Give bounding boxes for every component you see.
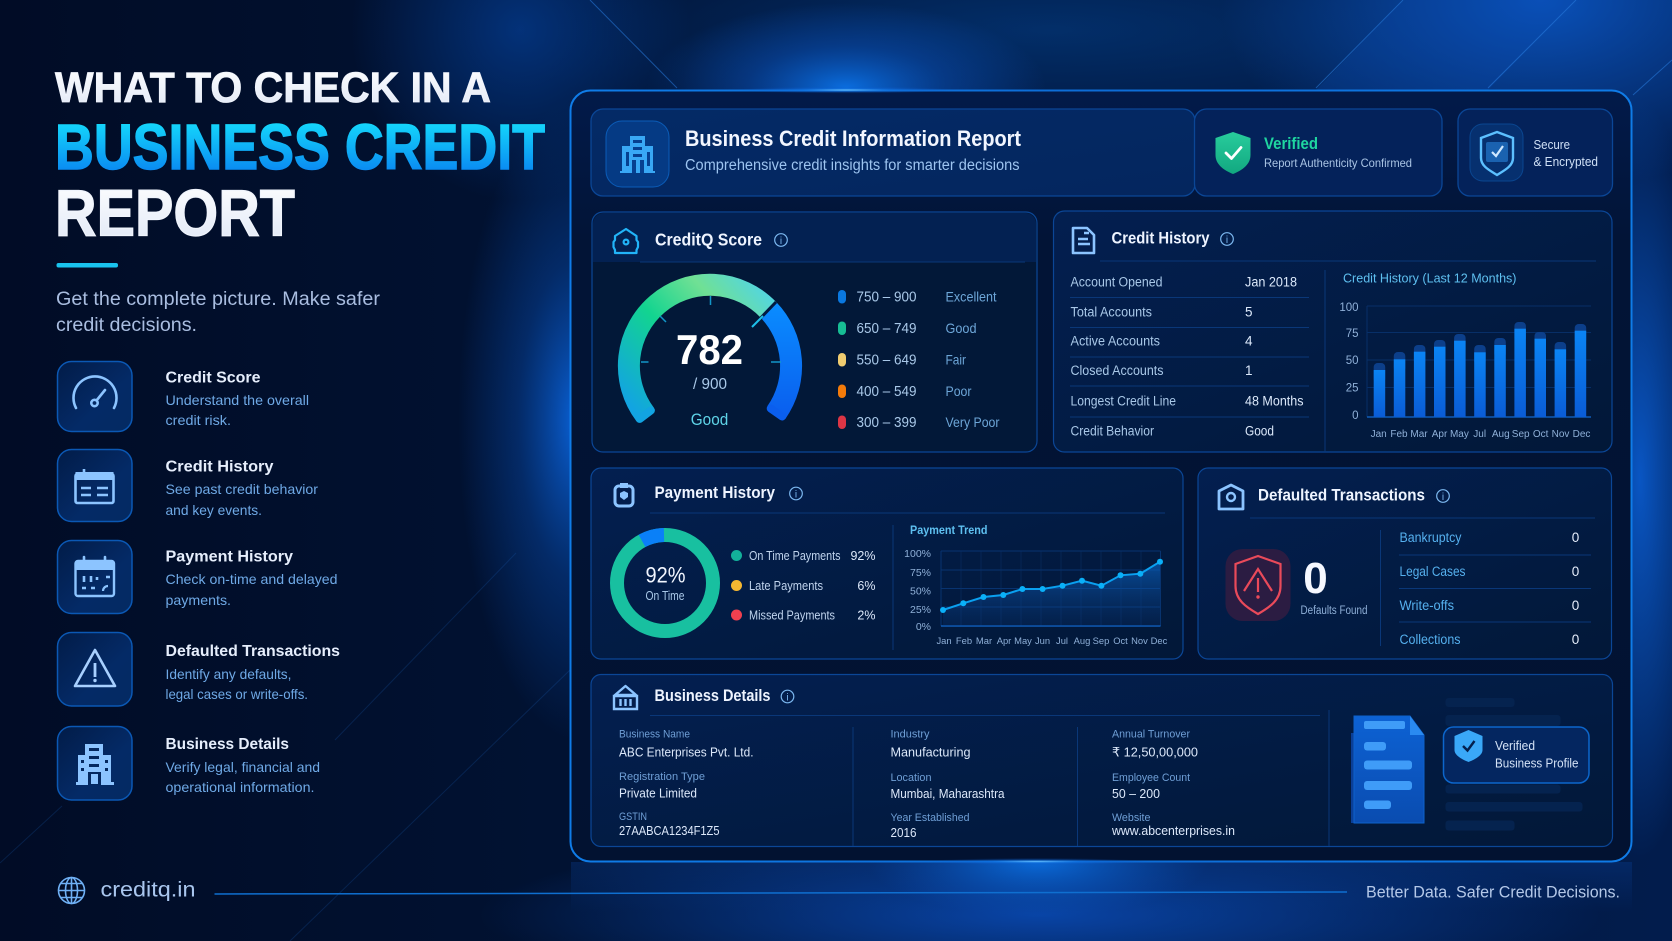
bar chart: 50 [1346, 355, 1358, 367]
icon: bank [614, 686, 637, 709]
payment legend: Missed Payments [749, 608, 835, 622]
line chart: 100% [904, 548, 931, 560]
document illustration [1351, 716, 1424, 823]
defaults list [1399, 530, 1591, 647]
line chart: Jun [1035, 635, 1050, 646]
details column 1 [619, 728, 754, 838]
defaulted transactions text: Identify any defaults, [166, 666, 292, 682]
credit score text: credit risk. [166, 412, 231, 428]
score legend: Excellent [946, 288, 997, 304]
footer [58, 878, 1620, 904]
details column 2 [890, 728, 1005, 840]
details column 2: 2016 [890, 825, 916, 840]
credit history text: Credit History [166, 458, 274, 476]
line chart: Dec [1151, 635, 1168, 646]
icon: bank shield [1219, 485, 1243, 509]
score max: / 900 [693, 376, 727, 393]
business details text: Verify legal, financial and [166, 759, 320, 775]
line chart: 50% [910, 586, 931, 598]
info icon [1437, 490, 1449, 503]
history table: 1 [1245, 363, 1253, 378]
tagline: Better Data. Safer Credit Decisions. [1366, 884, 1620, 902]
line chart [904, 548, 1168, 646]
history table: Account Opened [1070, 274, 1162, 290]
score legend: Very Poor [946, 414, 1000, 430]
subtitle [56, 289, 381, 336]
line chart: 25% [910, 604, 931, 616]
score legend [838, 288, 1000, 431]
score legend: 400 – 549 [856, 384, 916, 400]
heading: CreditQ Score [655, 230, 762, 250]
defaulted transactions text [166, 643, 340, 702]
payment history text [166, 548, 338, 608]
panel: credit history [1054, 211, 1612, 452]
details column 1: Business Name [619, 728, 690, 740]
bar chart: Nov [1552, 429, 1569, 440]
verified profile badge [1444, 727, 1589, 783]
bar chart: May [1450, 429, 1469, 440]
details column 2: Mumbai, Maharashtra [890, 786, 1005, 801]
donut value: 92% [646, 562, 686, 588]
info icon [775, 234, 787, 247]
bar chart: Jan [1371, 429, 1387, 440]
history table: Total Accounts [1070, 304, 1152, 320]
defaults list: Legal Cases [1400, 564, 1466, 579]
info icon [781, 690, 794, 704]
business details text: Business Details [166, 736, 289, 753]
title [55, 64, 545, 250]
bar chart [1339, 302, 1591, 440]
trend title: Payment Trend [910, 523, 988, 537]
history table: 5 [1245, 304, 1253, 320]
details column 2: Industry [890, 728, 930, 740]
score legend: Fair [946, 352, 966, 368]
line chart: May [1014, 635, 1032, 646]
verified text: Verified [1264, 134, 1318, 153]
icon: building [76, 744, 114, 785]
item: payment history [58, 540, 338, 614]
defaults list: 0 [1572, 598, 1579, 613]
details column 2: Year Established [890, 812, 970, 824]
chart title: Credit History (Last 12 Months) [1343, 270, 1516, 286]
payment legend: On Time Payments [749, 549, 840, 563]
verified profile badge: Verified [1495, 739, 1535, 753]
business details text [166, 736, 320, 795]
defaults list: 0 [1572, 530, 1579, 545]
title: BUSINESS CREDIT [55, 111, 545, 183]
bar chart: 0 [1352, 410, 1358, 422]
line chart: Feb [956, 635, 972, 646]
credit score text: Credit Score [166, 370, 261, 386]
history table: Closed Accounts [1070, 363, 1164, 378]
defaults label: Defaults Found [1300, 605, 1368, 617]
history table: Credit Behavior [1070, 424, 1154, 438]
icon: document [1073, 228, 1094, 253]
panel: payment history [591, 468, 1183, 659]
payment history text: Payment History [166, 548, 293, 566]
verified text [1264, 134, 1412, 170]
score legend: 650 – 749 [856, 321, 916, 337]
line chart: Mar [976, 635, 992, 646]
secure text: Secure [1534, 138, 1570, 152]
details column 3: 50 – 200 [1112, 786, 1160, 801]
icon: secure shield [1470, 124, 1523, 181]
history table: 4 [1245, 334, 1253, 348]
item: credit history [58, 450, 318, 522]
subtitle: Get the complete picture. Make safer [56, 289, 381, 310]
website: creditq.in [100, 878, 196, 902]
donut chart [617, 535, 713, 631]
info icon [790, 487, 802, 500]
item: credit score [58, 362, 309, 432]
details column 3: www.abcenterprises.in [1111, 823, 1235, 838]
details column 1: Registration Type [619, 771, 705, 783]
details column 1: ABC Enterprises Pvt. Ltd. [619, 744, 754, 760]
details column 3: Annual Turnover [1112, 728, 1190, 740]
bar chart: 25 [1346, 382, 1358, 394]
score legend: 300 – 399 [856, 415, 916, 431]
secure card [1458, 109, 1612, 196]
bar chart: Dec [1573, 429, 1590, 440]
info icon: i [1442, 492, 1444, 503]
info icon: i [786, 692, 789, 704]
donut label: On Time [646, 589, 685, 603]
icon: warning triangle [75, 650, 115, 686]
payment legend: Late Payments [749, 579, 823, 593]
bar chart: Aug [1492, 429, 1510, 440]
details column 3: Website [1112, 812, 1150, 824]
title: REPORT [55, 176, 295, 250]
line chart: Jul [1056, 635, 1068, 646]
details column 1: GSTIN [619, 811, 647, 823]
heading: Credit History [1112, 230, 1210, 248]
verified card [1194, 109, 1442, 196]
gauge chart [629, 285, 791, 429]
verified text: Report Authenticity Confirmed [1264, 156, 1412, 170]
credit history text [166, 458, 318, 518]
panel: business details [591, 674, 1612, 846]
defaulted transactions text: legal cases or write-offs. [166, 686, 308, 702]
info icon: i [780, 236, 782, 247]
line chart: Oct [1113, 635, 1128, 646]
heading: Payment History [654, 484, 776, 502]
score value: 782 [676, 326, 743, 373]
details column 1: Private Limited [619, 786, 697, 800]
info icon [1221, 233, 1233, 246]
details column 3: Employee Count [1112, 772, 1190, 784]
payment history text: Check on-time and delayed [166, 571, 338, 587]
line chart: 0% [916, 621, 931, 633]
score rating: Good [691, 410, 728, 429]
info icon: i [795, 490, 797, 500]
payment legend: 92% [850, 549, 876, 563]
report header [591, 109, 1195, 196]
credit score text: Understand the overall [166, 392, 309, 408]
defaults count: 0 [1303, 554, 1328, 603]
bar chart: Apr [1432, 429, 1448, 440]
bar chart: Jul [1473, 429, 1486, 440]
secure text [1534, 138, 1598, 169]
heading: Defaulted Transactions [1258, 486, 1425, 504]
item: defaulted transactions [58, 632, 340, 706]
bar chart: 100 [1339, 302, 1358, 314]
defaulted transactions text: Defaulted Transactions [166, 643, 340, 660]
panel: defaulted transactions [1198, 468, 1612, 659]
history table: Jan 2018 [1245, 274, 1297, 290]
details column 3: ₹ 12,50,00,000 [1112, 744, 1198, 760]
payment history text: payments. [166, 592, 231, 608]
defaults list: 0 [1572, 632, 1579, 647]
subtitle: credit decisions. [56, 315, 197, 336]
line chart: Sep [1093, 635, 1109, 646]
details column 3 [1111, 728, 1235, 838]
header subtitle: Comprehensive credit insights for smarter decisions [685, 157, 1020, 174]
title: WHAT TO CHECK IN A [55, 64, 491, 112]
icon: calendar list [76, 469, 114, 503]
icon: calendar [76, 557, 114, 596]
placeholder lines [1446, 698, 1582, 830]
score legend: 750 – 900 [856, 290, 916, 306]
bar chart: Mar [1410, 429, 1428, 440]
line chart: 75% [910, 567, 931, 579]
defaults list: Bankruptcy [1400, 530, 1462, 545]
credit history text: See past credit behavior [166, 481, 318, 497]
bar chart: Oct [1533, 429, 1549, 440]
line chart: Apr [997, 635, 1011, 646]
history table: Longest Credit Line [1070, 394, 1176, 408]
defaults list: Collections [1400, 632, 1461, 647]
details column 2: Location [890, 772, 932, 784]
score legend: 550 – 649 [856, 352, 916, 368]
history table [1070, 274, 1309, 438]
icon: globe [58, 878, 84, 904]
history table: Active Accounts [1070, 334, 1160, 348]
verified profile badge: Business Profile [1495, 756, 1579, 770]
icon: red alert shield [1226, 549, 1290, 621]
line chart: Nov [1131, 635, 1148, 646]
bar chart: Feb [1390, 429, 1408, 440]
bar chart: Sep [1512, 429, 1530, 440]
info icon: i [1226, 235, 1228, 246]
icon: payment shield [615, 483, 633, 506]
score legend: Good [946, 320, 976, 336]
score legend: Poor [946, 383, 972, 399]
line chart: Jan [936, 635, 952, 646]
bar chart: 75 [1346, 328, 1358, 340]
secure text: & Encrypted [1534, 155, 1598, 169]
heading: Business Details [654, 687, 770, 705]
defaults list: 0 [1572, 564, 1579, 579]
panel: creditq score [592, 212, 1037, 452]
history table: 48 Months [1245, 394, 1304, 408]
credit history text: and key events. [166, 502, 262, 518]
main dashboard panel [570, 86, 1632, 865]
header title: Business Credit Information Report [685, 126, 1022, 151]
icon: house pin [614, 229, 638, 253]
business details text: operational information. [166, 779, 314, 795]
details column 2: Manufacturing [890, 744, 970, 760]
details column 1: 27AABCA1234F1Z5 [619, 823, 720, 838]
line chart: Aug [1074, 635, 1090, 646]
item: business details [58, 726, 320, 800]
icon: gauge [74, 376, 116, 408]
header building icon [606, 121, 669, 187]
accent bar [56, 263, 118, 268]
payment legend [731, 549, 876, 622]
payment legend: 2% [857, 608, 876, 622]
history table: Good [1245, 424, 1274, 438]
payment legend: 6% [857, 579, 876, 593]
defaults list: Write-offs [1400, 598, 1454, 613]
credit score text [166, 370, 309, 428]
icon: green shield [1216, 132, 1250, 174]
